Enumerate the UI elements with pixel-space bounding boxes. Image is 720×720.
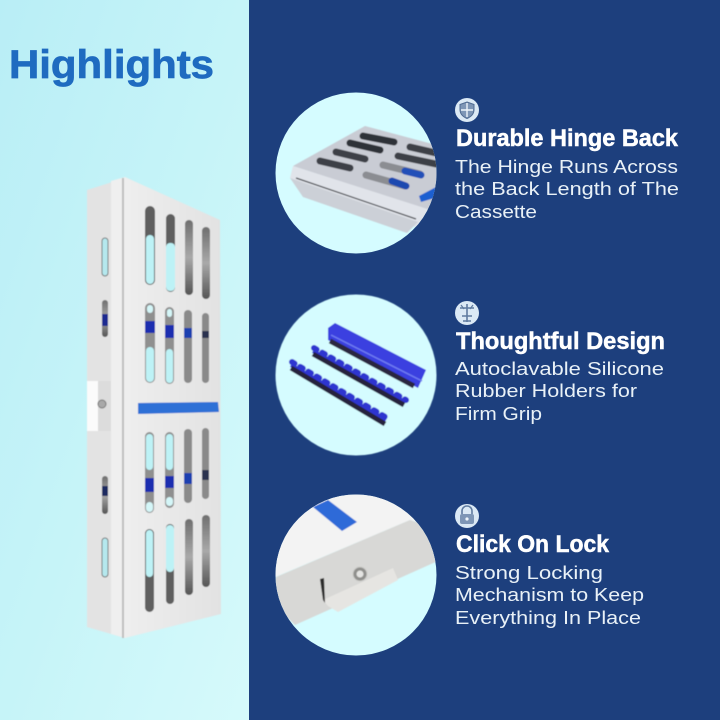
text: design description: Rubber Holders for (455, 380, 637, 401)
holder 1 (328, 323, 426, 388)
side slots (102, 238, 108, 577)
tray front band (290, 166, 440, 228)
product photo: instrument cassette (87, 177, 221, 638)
latch plate (323, 568, 398, 612)
feature photo: click lock (270, 490, 440, 656)
latch notch (320, 578, 325, 603)
blue locking clip (138, 402, 219, 414)
text: lock description (455, 562, 644, 628)
text: hinge description: Cassette (455, 201, 537, 222)
feature photo: hinge (276, 92, 440, 254)
feature icon: shield (455, 98, 479, 122)
slots row 4 (145, 515, 210, 612)
lid surface (276, 494, 417, 578)
heading: click on lock: Click On Lock (456, 531, 610, 558)
slots row 3 (145, 428, 209, 513)
feature icon: padlock (455, 504, 479, 528)
text: design description: Firm Grip (455, 403, 542, 424)
right navy panel (249, 0, 720, 720)
text: lock description: Everything In Place (455, 607, 641, 628)
slots row 2 (145, 303, 209, 384)
blue tab (313, 500, 357, 531)
latch screw (98, 400, 106, 408)
screw (353, 567, 367, 581)
cassette hinge band (111, 177, 125, 638)
holder 3 (291, 362, 387, 424)
text: hinge description: the Back Length of The (455, 178, 679, 199)
tray plate (293, 126, 440, 214)
hinge barrel (290, 178, 418, 233)
feature icon: tools (455, 301, 479, 325)
plate slots (320, 136, 436, 186)
slots row 1 (145, 206, 210, 299)
text: design description: Autoclavable Silicone (455, 358, 664, 379)
heading: thoughtful design: Thoughtful Design (456, 328, 665, 355)
feature photo: silicone holders (276, 294, 436, 456)
latch notch (87, 381, 98, 431)
text: hinge description: The Hinge Runs Across (455, 156, 678, 177)
cassette side wall (87, 178, 125, 638)
text: lock description: Mechanism to Keep (455, 584, 644, 605)
left background panel (0, 0, 249, 720)
side wall (270, 520, 440, 625)
title: Highlights (9, 43, 214, 87)
blue clip (418, 187, 436, 202)
text: lock description: Strong Locking (455, 562, 603, 583)
text: design description (455, 358, 664, 424)
heading: durable hinge back: Durable Hinge Back (456, 125, 679, 152)
holder 2 (313, 348, 406, 405)
text: hinge description (455, 156, 679, 222)
cassette top plate (125, 177, 221, 638)
